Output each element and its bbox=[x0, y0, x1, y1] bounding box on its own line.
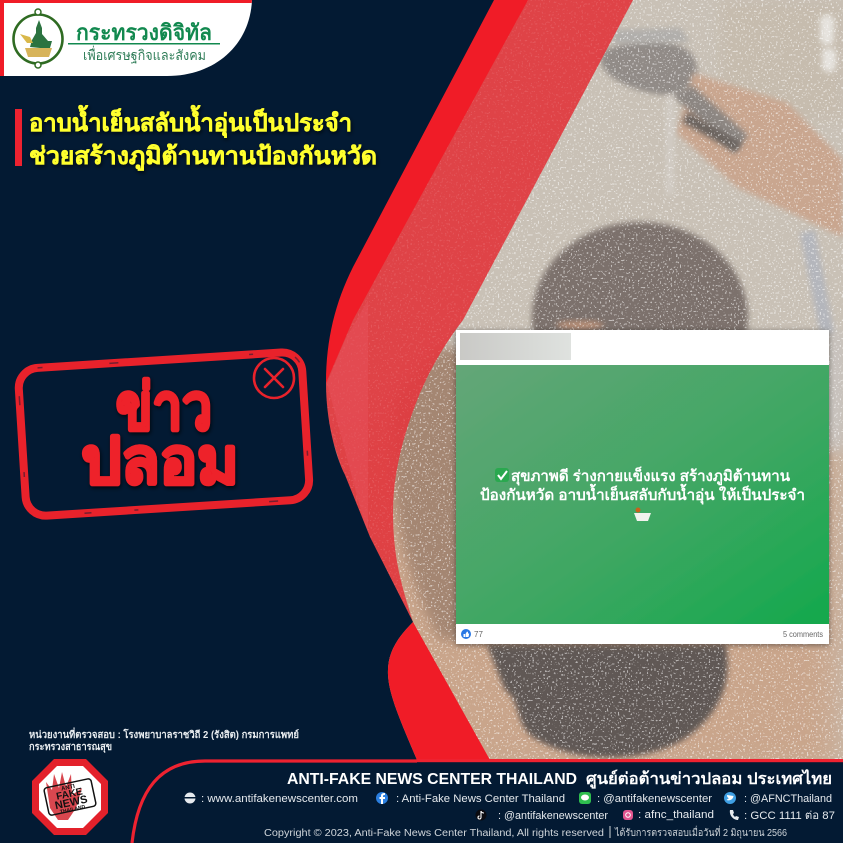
footer contacts row 2 bbox=[476, 809, 835, 822]
blurred account name bbox=[460, 333, 571, 360]
post text: สุขภาพดี ร่างกายแข็งแรง สร้างภูมิต้านทาน bbox=[511, 466, 791, 486]
source note bbox=[29, 727, 299, 753]
solid red curved blob bbox=[388, 622, 490, 760]
icon: twitter bbox=[724, 792, 736, 804]
title accent bar bbox=[15, 109, 22, 166]
logo wording: NEWS bbox=[54, 794, 89, 812]
title: อาบน้ำเย็นสลับน้ำอุ่นเป็นประจำ bbox=[29, 104, 352, 139]
icon: website globe bbox=[184, 792, 196, 804]
icon: like bbox=[461, 629, 471, 639]
ministry tagline: เพื่อเศรษฐกิจและสังคม bbox=[83, 46, 206, 64]
icon: bathtub bbox=[634, 508, 651, 521]
post text bbox=[480, 466, 805, 505]
footer contacts row 2: : afnc_thailand bbox=[638, 809, 714, 821]
stamp: fake news bbox=[18, 351, 310, 517]
title bbox=[29, 104, 377, 171]
ministry name: กระทรวงดิจิทัล bbox=[76, 20, 212, 45]
footer contacts row 1: : @AFNCThailand bbox=[744, 793, 832, 805]
footer contacts row 1: : Anti-Fake News Center Thailand bbox=[396, 793, 565, 805]
copyright line: Copyright © 2023, Anti-Fake News Center Thailand, All rights reserved bbox=[264, 828, 604, 839]
ministry logo panel bbox=[0, 0, 252, 76]
lighter strip in red band bbox=[327, 300, 368, 537]
comment count: 5 comments bbox=[783, 630, 823, 639]
stamp text: ปลอม bbox=[82, 425, 238, 497]
footer heading bbox=[287, 769, 832, 790]
icon: facebook bbox=[376, 792, 388, 804]
footer contacts row 2: : GCC 1111 ต่อ 87 bbox=[744, 810, 835, 822]
footer contacts row 2: : @antifakenewscenter bbox=[498, 810, 608, 822]
green post background bbox=[456, 365, 829, 624]
icon: check mark bbox=[495, 468, 509, 482]
photo: person showering behind wet glass bbox=[300, 0, 843, 780]
icon: tiktok bbox=[476, 810, 486, 820]
footer heading: ศูนย์ต่อต้านข่าวปลอม ประเทศไทย bbox=[586, 769, 832, 790]
stamp text bbox=[82, 371, 238, 497]
source note: หน่วยงานที่ตรวจสอบ : โรงพยาบาลราชวิถี 2 (รังสิต) กรมการแพทย์ bbox=[29, 727, 299, 741]
logo wording bbox=[51, 782, 89, 816]
copyright line bbox=[264, 825, 787, 839]
anti-fake news logo bbox=[32, 759, 108, 835]
title: ช่วยสร้างภูมิต้านทานป้องกันหวัด bbox=[29, 143, 377, 171]
logo wording: THAILAND bbox=[60, 804, 86, 815]
footer contacts row 1 bbox=[184, 792, 832, 805]
translucent red band over photo bbox=[320, 0, 633, 622]
droplets showing through red band bbox=[326, 0, 630, 616]
stamp text: ข่าว bbox=[116, 371, 212, 443]
logo stamp box bbox=[44, 778, 96, 816]
icon: ministry emblem bbox=[14, 9, 62, 68]
icon: instagram bbox=[623, 810, 633, 820]
source note: กระทรวงสาธารณสุข bbox=[29, 742, 112, 753]
icon: line bbox=[579, 792, 591, 804]
post text: ป้องกันหวัด อาบน้ำเย็นสลับกับน้ำอุ่น ให้เป็นประจำ bbox=[480, 483, 805, 505]
footer panel bbox=[132, 759, 843, 843]
navy curved panel bbox=[0, 0, 494, 760]
icon: hand bbox=[46, 772, 82, 820]
footer contacts row 1: : @antifakenewscenter bbox=[597, 793, 712, 805]
footer contacts row 1: : www.antifakenewscenter.com bbox=[201, 793, 358, 805]
icon: cross in circle bbox=[254, 358, 294, 398]
solid red band bbox=[326, 0, 528, 383]
logo wording: FAKE bbox=[55, 786, 84, 803]
facebook post card bbox=[456, 330, 829, 644]
logo wording: ANTI bbox=[61, 784, 76, 793]
icon: phone bbox=[730, 810, 739, 820]
like count: 77 bbox=[474, 630, 483, 639]
footer heading: ANTI-FAKE NEWS CENTER THAILAND bbox=[287, 771, 577, 788]
copyright line: ได้รับการตรวจสอบเมื่อวันที่ 2 มิถุนายน 2566 bbox=[614, 825, 787, 839]
